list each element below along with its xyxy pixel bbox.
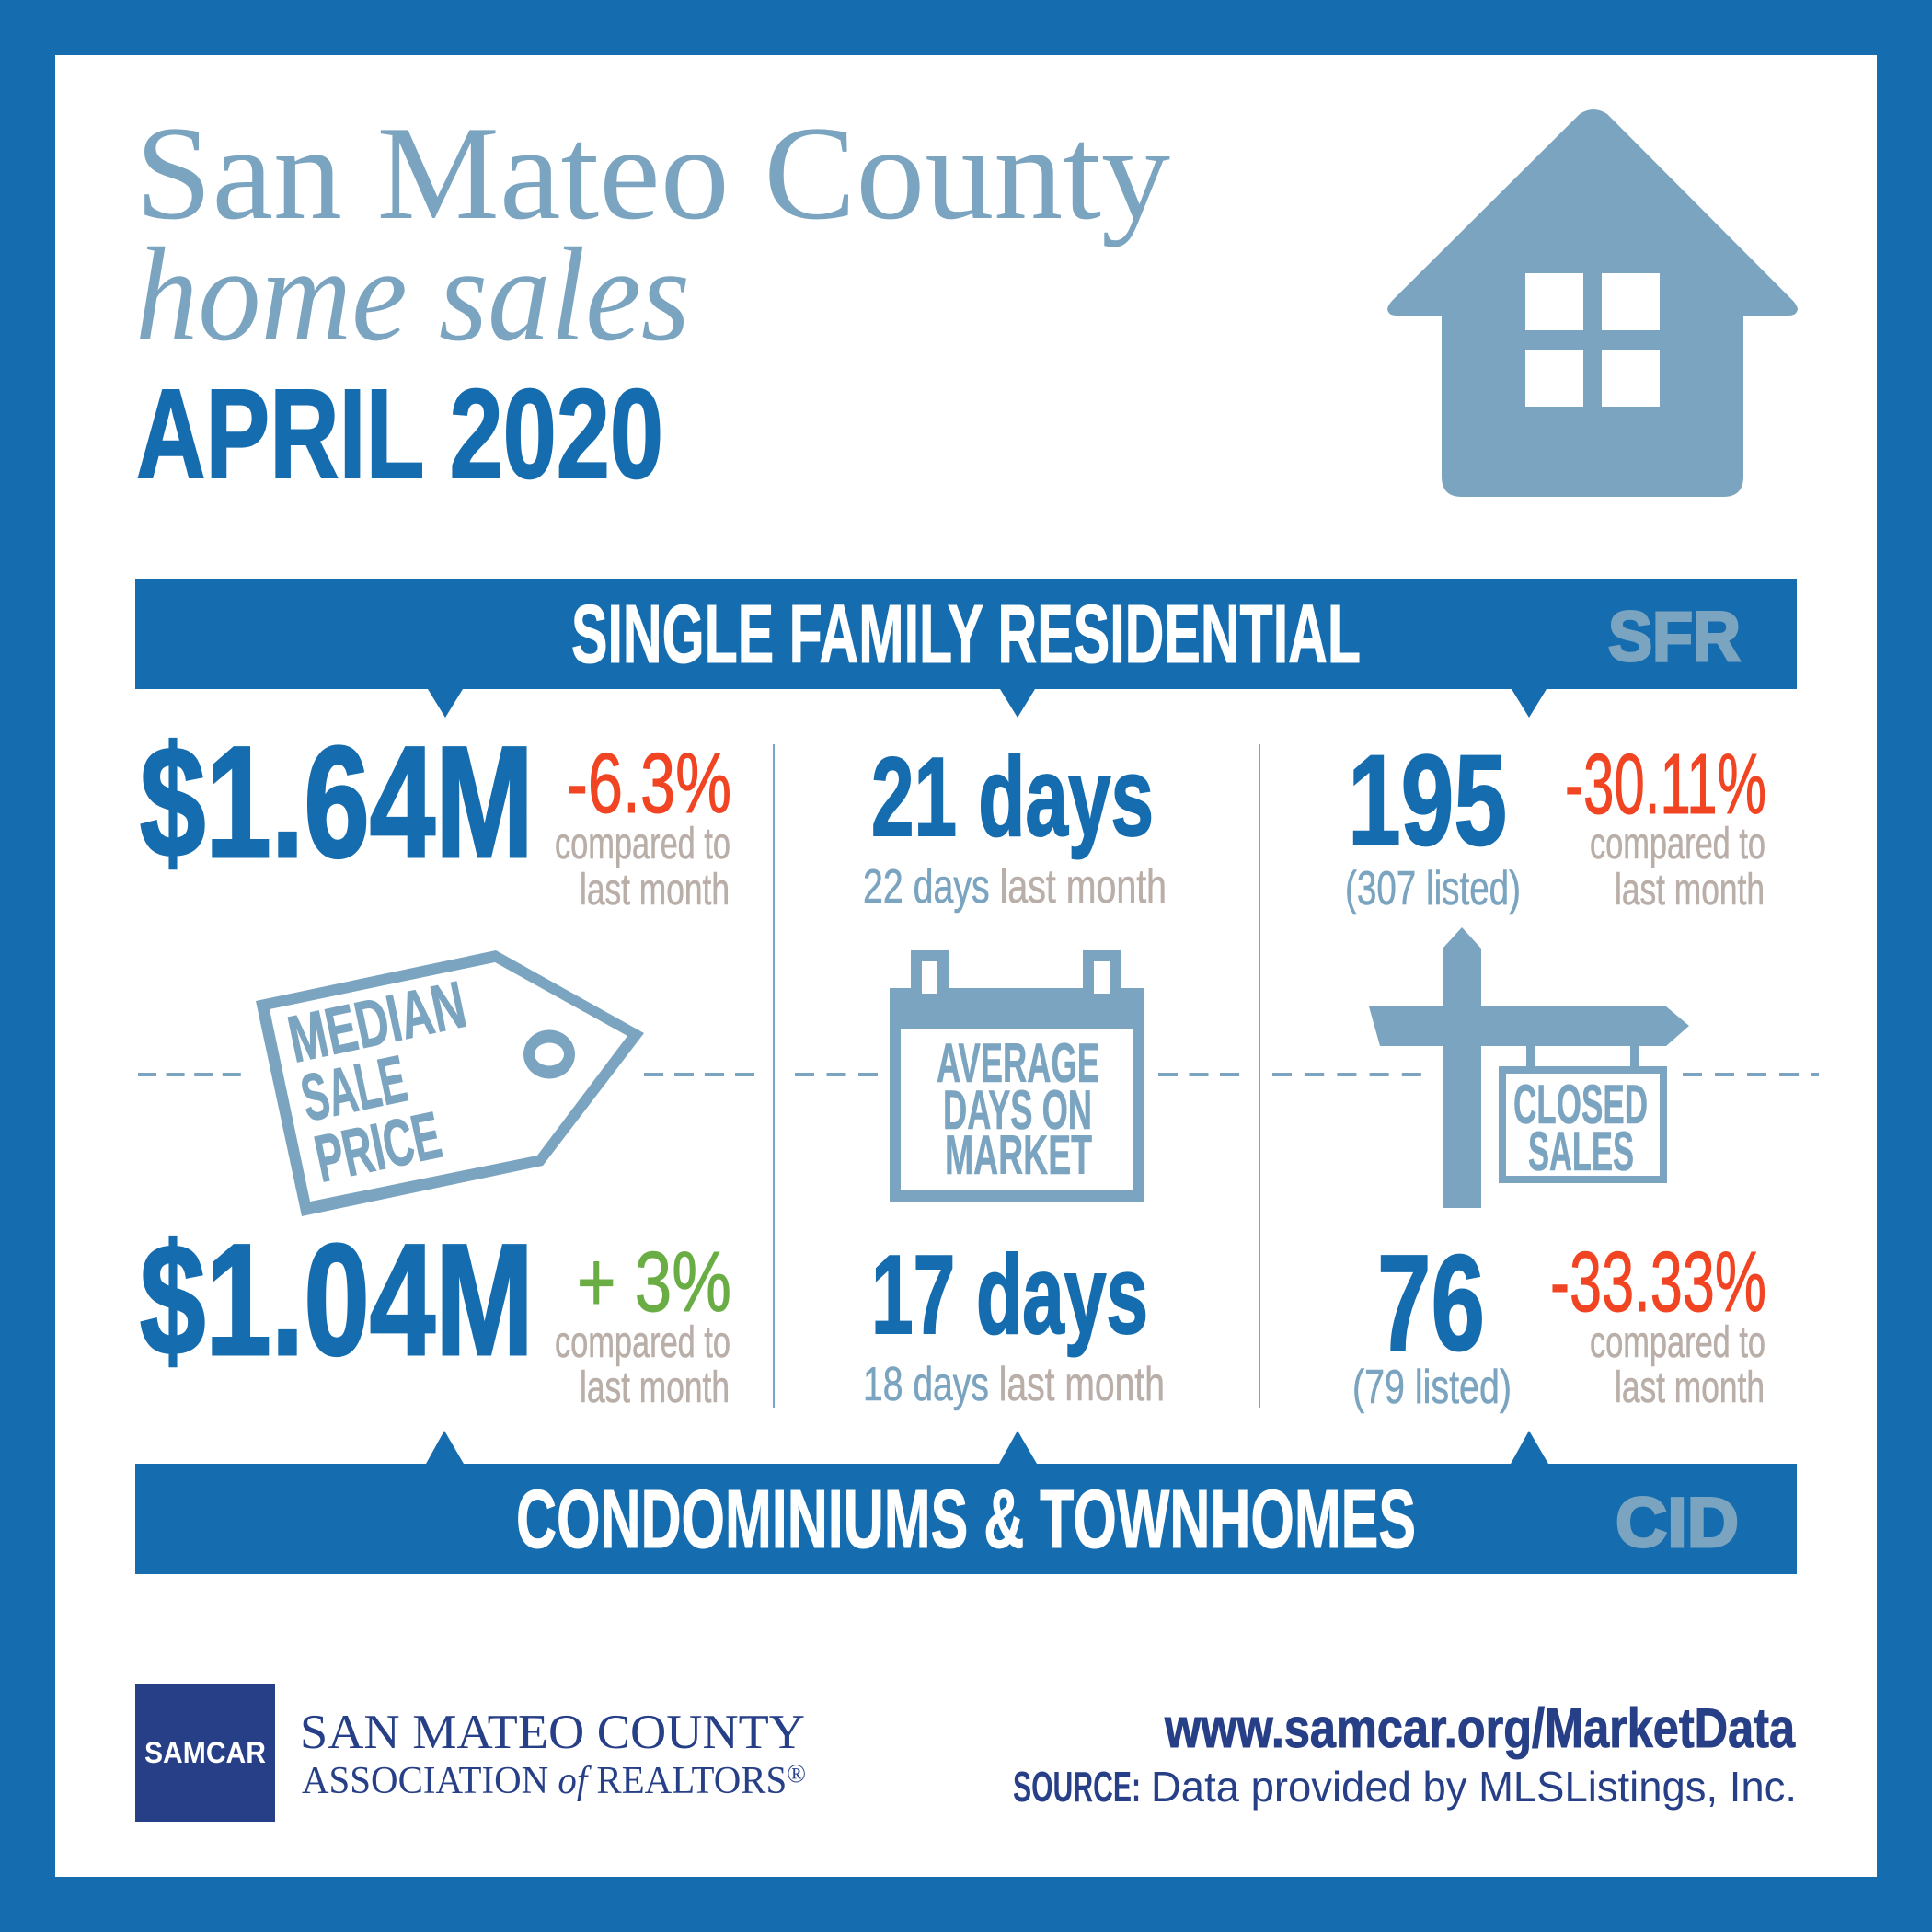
stat: SFR median sale price xyxy=(140,714,731,914)
value: $1.64M: $1.64M xyxy=(140,714,534,891)
date: April 2020: APRIL 2020 xyxy=(136,363,663,505)
website link: www.samcar.org/MarketData xyxy=(1164,1697,1796,1759)
banner code: SFR: SFR xyxy=(1608,598,1741,676)
label: average days on market: MARKET xyxy=(945,1124,1092,1186)
column dividers xyxy=(774,744,1259,1408)
source line: Data provided by MLSListings, Inc. xyxy=(1151,1763,1797,1811)
banner heading: CID full name: CONDOMINIUMS & TOWNHOMES xyxy=(516,1474,1416,1566)
label: median sale price: MEDIAN xyxy=(282,968,472,1077)
banner heading: SFR full name: SINGLE FAMILY RESIDENTIAL xyxy=(571,589,1361,681)
icon: calendar with average days on market label xyxy=(890,950,1144,1202)
value: $1.04M: $1.04M xyxy=(140,1212,534,1388)
note: compared to last month xyxy=(555,1318,730,1412)
icon: house xyxy=(1387,109,1798,497)
label: closed sales: SALES xyxy=(1528,1121,1634,1182)
value: 21 days: 21 days xyxy=(871,734,1154,859)
organisation name: SAN MATEO COUNTY xyxy=(300,1706,805,1759)
note: 18 days last month: 18 days last month xyxy=(863,1358,1165,1411)
note: compared to last month xyxy=(1590,820,1765,914)
banner code: CID: CID xyxy=(1616,1484,1739,1562)
label: average days on market: DAYS ON xyxy=(943,1079,1092,1141)
note: compared to last month: last month xyxy=(580,1363,730,1412)
label: closed sales xyxy=(1513,1074,1648,1182)
stat: CID average days on market xyxy=(863,1232,1165,1411)
title block xyxy=(135,98,1170,505)
title: San Mateo County: San Mateo County xyxy=(135,98,1170,247)
change: -30.11%: -30.11% xyxy=(1565,736,1766,832)
source line: SOURCE: xyxy=(1013,1763,1141,1811)
note: 22 days last month: 22 days last month xyxy=(863,860,1167,914)
note: compared to last month: compared to xyxy=(555,820,730,868)
value: 17 days: 17 days xyxy=(871,1232,1148,1357)
note: compared to last month: compared to xyxy=(1590,820,1765,868)
note: compared to last month xyxy=(1590,1318,1765,1412)
note: compared to last month xyxy=(555,820,730,914)
change: +3%: + 3% xyxy=(577,1234,731,1329)
note: compared to last month: last month xyxy=(1615,866,1765,914)
banner: condominiums and townhomes xyxy=(135,1431,1797,1574)
label: median sale price: PRICE xyxy=(309,1098,447,1197)
note: compared to last month: last month xyxy=(580,866,730,914)
icon: price tag with median sale price label xyxy=(256,950,644,1216)
label: median sale price: SALE xyxy=(295,1042,413,1136)
note: 307 listed: (307 listed) xyxy=(1345,862,1521,915)
logo: SAMCAR xyxy=(135,1684,275,1822)
label: average days on market xyxy=(937,1032,1099,1186)
stat: CID median sale price xyxy=(140,1212,731,1412)
organisation name xyxy=(300,1706,806,1802)
subtitle: home sales: home sales xyxy=(135,220,690,369)
note: compared to last month: compared to xyxy=(555,1318,730,1367)
value: 76: 76 xyxy=(1377,1227,1485,1379)
note: compared to last month: compared to xyxy=(1590,1318,1765,1367)
label: median sale price xyxy=(282,968,472,1197)
label: average days on market: AVERAGE xyxy=(937,1032,1099,1094)
logo: SAMCAR: SAMCAR xyxy=(144,1736,266,1769)
change: -6.3%: -6.3% xyxy=(567,735,731,831)
stat: SFR average days on market xyxy=(863,734,1167,914)
organisation name: ASSOCIATION of REALTORS xyxy=(302,1760,792,1802)
stat: CID closed sales xyxy=(1352,1227,1766,1414)
stat: SFR closed sales xyxy=(1345,728,1766,915)
label: closed sales: CLOSED xyxy=(1513,1074,1648,1135)
note: compared to last month: last month xyxy=(1615,1363,1765,1412)
banner: single family residential xyxy=(135,579,1797,718)
change: -33.33%: -33.33% xyxy=(1550,1234,1766,1329)
note: 79 listed: (79 listed) xyxy=(1352,1361,1512,1414)
value: 195: 195 xyxy=(1348,728,1507,872)
organisation name: ® xyxy=(787,1760,806,1788)
icon: hanging real estate sign with closed sales label xyxy=(1369,927,1689,1208)
